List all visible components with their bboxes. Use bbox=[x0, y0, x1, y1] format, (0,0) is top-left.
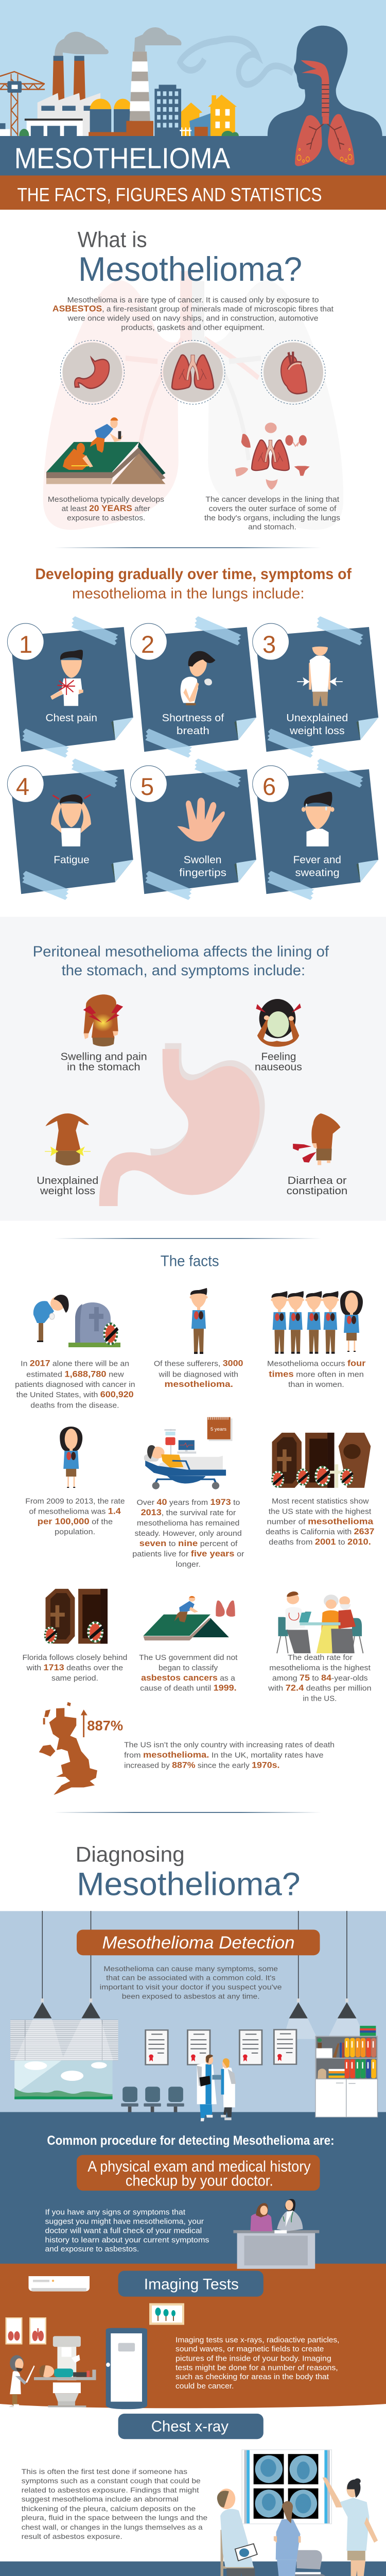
icon: lungs bbox=[161, 341, 225, 404]
labels: peritoneal symptoms: constipation bbox=[287, 1185, 347, 1197]
panel: hero header bbox=[0, 0, 386, 210]
detection text: important to visit your doctor if you suspect you've bbox=[100, 1983, 282, 1991]
illustration: roofer and lungs bbox=[143, 1596, 235, 1640]
title: MESOTHELIOMA bbox=[14, 142, 230, 175]
fact: death rate by age: with 72.4 deaths per million bbox=[268, 1683, 372, 1693]
card labels: weight loss bbox=[289, 725, 345, 737]
text: develops after 20 years: Mesothelioma typically develops bbox=[48, 495, 164, 504]
illustration: patient and doctor at desk bbox=[233, 2199, 319, 2269]
calendar label: 5 years bbox=[210, 1427, 227, 1432]
heading: peritoneal: the stomach, and symptoms include: bbox=[62, 962, 305, 979]
panel: CT scan bbox=[0, 2450, 386, 2576]
illustration: two coffins bbox=[44, 1589, 108, 1643]
labels: peritoneal symptoms: in the stomach bbox=[67, 1061, 141, 1073]
illustration: doctor's office bbox=[10, 1998, 364, 2119]
fact: government classification: The US government did not bbox=[139, 1653, 238, 1662]
fact: four times more in men: Mesothelioma occurs four bbox=[267, 1359, 366, 1368]
card labels: Unexplained bbox=[286, 713, 348, 724]
labels: peritoneal symptoms: Swelling and pain bbox=[61, 1051, 147, 1062]
card labels: sweating bbox=[295, 867, 340, 878]
fact: rate per 100,000: per 100,000 of the bbox=[38, 1516, 113, 1526]
fact: death rate by age: The death rate for bbox=[288, 1653, 353, 1662]
figure: nurse bbox=[274, 2501, 301, 2576]
illustration: coffins with wreaths bbox=[271, 1433, 371, 1488]
fact: rate per 100,000: From 2009 to 2013, the rate bbox=[25, 1497, 125, 1505]
fact: 3000 diagnosed: mesothelioma. bbox=[165, 1379, 233, 1389]
card numbers bbox=[16, 631, 276, 800]
card numbers: 4 bbox=[16, 773, 29, 800]
card labels: Fatigue bbox=[54, 855, 90, 866]
icon: UK map with rising arrow bbox=[39, 1702, 123, 1795]
heading: lung symptoms: mesothelioma in the lungs include: bbox=[72, 585, 305, 602]
card numbers: 1 bbox=[19, 631, 32, 658]
panel background bbox=[0, 2562, 386, 2576]
figure: swollen fingertips bbox=[177, 798, 225, 841]
panel: mesothelioma detection bbox=[0, 1911, 386, 2119]
waiting chairs bbox=[121, 2087, 184, 2119]
figure: feeling nauseous bbox=[256, 999, 301, 1047]
chest x-ray text bbox=[22, 2467, 207, 2540]
card labels: breath bbox=[177, 725, 209, 737]
symptom cards bbox=[7, 616, 378, 900]
hero illustration bbox=[0, 0, 386, 142]
certificates bbox=[145, 2029, 297, 2065]
figure: fever and sweating bbox=[302, 792, 335, 846]
pill: imaging tests: Imaging Tests bbox=[144, 2276, 239, 2293]
subtitle: THE FACTS, FIGURES AND STATISTICS bbox=[17, 184, 322, 205]
fact: rate per 100,000: population. bbox=[55, 1528, 95, 1536]
anatomy posters bbox=[5, 2317, 46, 2345]
figure: fatigue bbox=[51, 794, 91, 846]
chest x-ray text: suggest mesothelioma include an abnormal bbox=[22, 2495, 179, 2503]
background: faint lungs watermark bbox=[43, 271, 343, 530]
figure: man with lungs bbox=[189, 1288, 208, 1354]
x-ray machine and patient bbox=[34, 2336, 96, 2407]
labels: peritoneal symptoms: Diarrhea or bbox=[288, 1175, 347, 1187]
text: where the cancer develops: the body's organs, including the lungs bbox=[204, 514, 340, 522]
text: develops after 20 years: at least 20 YEARS after bbox=[62, 503, 150, 513]
heading: the facts: The facts bbox=[161, 1253, 219, 1269]
fact: florida: with 1713 deaths over the bbox=[26, 1663, 123, 1672]
window bbox=[10, 2020, 118, 2099]
illustration: hospital bed and calendar bbox=[144, 1417, 233, 1489]
fact: 2017 new patients: deaths from the disease. bbox=[30, 1401, 119, 1410]
intro text bbox=[52, 296, 334, 332]
fact: UK mortality: increased by 887% since the early 1970s. bbox=[124, 1760, 279, 1770]
imaging tests text: pictures of the inside of your body. Imaging bbox=[176, 2354, 331, 2363]
panel: what is mesothelioma bbox=[46, 228, 340, 532]
panel background bbox=[0, 2264, 386, 2408]
labels: peritoneal symptoms: Feeling bbox=[261, 1051, 296, 1062]
chest x-ray text: pleura, fluid in the space between the lungs and the bbox=[22, 2514, 207, 2522]
wall picture bbox=[149, 2303, 184, 2325]
card labels: Swollen bbox=[184, 855, 221, 866]
imaging tests text: such as checking for areas in the body that bbox=[176, 2373, 329, 2381]
fact: 3000 diagnosed bbox=[154, 1359, 243, 1389]
figures bbox=[50, 647, 343, 846]
labels: peritoneal symptoms: nauseous bbox=[255, 1061, 302, 1073]
fact: 2017 new patients bbox=[15, 1359, 135, 1410]
fact: survival rate: longer. bbox=[176, 1560, 201, 1569]
fact: survival rate: Over 40 years from 1973 to bbox=[137, 1497, 240, 1507]
fact: four times more in men: than in women. bbox=[288, 1380, 344, 1389]
panel: the facts bbox=[15, 1253, 374, 1795]
panel: common procedures bbox=[0, 2026, 386, 2264]
card labels bbox=[45, 713, 348, 878]
coat stand bbox=[221, 2530, 223, 2576]
fact: 3000 diagnosed: will be diagnosed with bbox=[158, 1370, 238, 1379]
intro text: were once widely used on navy ships, and in construction, automotive bbox=[67, 314, 318, 323]
pill: physical exam: A physical exam and medical history bbox=[87, 2158, 311, 2175]
stat: 887%: 887% bbox=[87, 1718, 123, 1733]
fact: survival rate bbox=[132, 1497, 244, 1569]
pill: mesothelioma detection bbox=[77, 1930, 320, 1955]
fact: california deaths: number of mesothelioma bbox=[267, 1516, 374, 1526]
figure: swelling and pain bbox=[83, 994, 123, 1046]
lamps bbox=[15, 1998, 364, 2060]
illustration: coughing patient and grave bbox=[33, 1295, 120, 1347]
illustration: roofers bbox=[46, 417, 165, 484]
text: where the cancer develops: covers the outer surface of some of bbox=[209, 504, 337, 513]
figure: chest pain bbox=[50, 650, 83, 706]
fact: 2017 new patients: estimated 1,688,780 new bbox=[26, 1369, 124, 1379]
icon: stomach bbox=[60, 341, 124, 404]
illustration: doctor and elderly couple bbox=[277, 1591, 363, 1653]
fact: government classification bbox=[139, 1653, 238, 1693]
illustration: imaging room bbox=[5, 2276, 184, 2409]
fact: UK mortality: The US isn’t the only country with increasing rates of death bbox=[124, 1740, 335, 1750]
card numbers: 6 bbox=[262, 773, 276, 800]
card labels: fingertips bbox=[179, 867, 226, 878]
detection text: Mesothelioma can cause many symptoms, some bbox=[103, 1964, 278, 1973]
figure: woman with lungs bbox=[60, 1427, 82, 1488]
figure: weight loss bbox=[45, 1113, 91, 1165]
heading: mesothelioma: Mesothelioma? bbox=[78, 250, 302, 288]
fact: survival rate: 2013, the survival rate for bbox=[141, 1507, 236, 1517]
fact: 2017 new patients: the United States, with 600,920 bbox=[16, 1389, 134, 1399]
panel background bbox=[0, 1911, 386, 2112]
heading: peritoneal: Peritoneal mesothelioma affects the lining of bbox=[33, 943, 329, 960]
fact: survival rate: mesothelioma has remained bbox=[137, 1519, 239, 1528]
heading: diagnosing mesothelioma: Mesothelioma? bbox=[77, 1867, 300, 1903]
figures: men and woman bbox=[271, 1291, 363, 1354]
fact: florida: Florida follows closely behind bbox=[23, 1653, 127, 1662]
fact: government classification: began to classify bbox=[159, 1664, 218, 1672]
card numbers: 3 bbox=[262, 631, 276, 658]
figure: female doctor pointing bbox=[323, 2478, 378, 2576]
panel background bbox=[0, 2112, 386, 2264]
fact: florida: same period. bbox=[51, 1674, 98, 1683]
imaging tests text: could be cancer. bbox=[176, 2382, 234, 2391]
figure: male doctor bbox=[197, 2055, 217, 2121]
physical exam text bbox=[45, 2208, 209, 2253]
fact: government classification: cause of death until 1999. bbox=[140, 1683, 237, 1693]
fact: california deaths: deaths is California with 2637 bbox=[266, 1527, 374, 1536]
pill: mesothelioma detection: Mesothelioma Detection bbox=[102, 1933, 294, 1953]
fact: california deaths: Most recent statistics show bbox=[272, 1497, 369, 1505]
figure: shortness of breath bbox=[181, 651, 216, 705]
text: develops after 20 years: exposure to asbestos. bbox=[67, 514, 145, 522]
chair bbox=[290, 2550, 325, 2576]
figure: diarrhea or constipation bbox=[293, 1113, 340, 1165]
pill: chest x-ray: Chest x-ray bbox=[151, 2418, 229, 2435]
card labels: Shortness of bbox=[162, 713, 224, 724]
heading: diagnosing mesothelioma bbox=[76, 1842, 301, 1903]
title band bbox=[0, 136, 386, 176]
heading: diagnosing mesothelioma: Diagnosing bbox=[76, 1842, 185, 1867]
text: where the cancer develops: and stomach. bbox=[248, 523, 296, 532]
illustration: large stomach bbox=[99, 1043, 265, 1206]
chest x-ray text: symptoms such as a constant cough that could be bbox=[22, 2477, 201, 2485]
chest x-ray text: related to asbestos exposure. Findings that might bbox=[22, 2486, 199, 2494]
figure: female doctor bbox=[212, 2058, 236, 2120]
panel: lung symptoms bbox=[7, 566, 378, 900]
fact: california deaths bbox=[266, 1497, 374, 1547]
icon: airway and lungs bbox=[295, 60, 355, 166]
physical exam text: suggest you might have mesothelioma, your bbox=[45, 2217, 204, 2226]
physical exam text: and exposure to asbestos. bbox=[45, 2245, 139, 2253]
fact: death rate by age: among 75 to 84-year-olds bbox=[272, 1673, 368, 1683]
figure: unexplained weight loss bbox=[297, 647, 343, 706]
lamp cords bbox=[42, 1911, 347, 1999]
fact: 3000 diagnosed: Of these sufferers, 3000 bbox=[154, 1359, 243, 1368]
text: where the cancer develops bbox=[204, 495, 340, 532]
bookshelf bbox=[315, 2026, 378, 2117]
heading: peritoneal bbox=[33, 943, 329, 979]
fact: california deaths: deaths from 2001 to 2010. bbox=[269, 1537, 371, 1547]
fact: death rate by age: mesothelioma is the highest bbox=[269, 1664, 371, 1672]
panel background bbox=[0, 917, 386, 1221]
chest x-ray text: chest wall, or changes in the lungs themselves as a bbox=[22, 2523, 203, 2531]
panel: imaging tests bbox=[0, 2199, 386, 2409]
fact: survival rate: steady. However, only around bbox=[135, 1529, 242, 1538]
chest x-ray text: result of asbestos exposure. bbox=[22, 2532, 122, 2540]
text: where the cancer develops: The cancer develops in the lining that bbox=[205, 495, 340, 504]
illustration: reading x-rays bbox=[217, 2450, 378, 2576]
door bbox=[106, 2328, 147, 2409]
air conditioner bbox=[29, 2276, 90, 2292]
fact: death rate by age: in the US. bbox=[303, 1694, 337, 1703]
fact: survival rate: seven to nine percent of bbox=[139, 1538, 238, 1548]
card labels: Fever and bbox=[293, 855, 341, 866]
chest x-ray text: thickening of the pleura, calcium deposits on the bbox=[22, 2504, 196, 2513]
heading: lung symptoms: Developing gradually over time, symptoms of bbox=[35, 566, 352, 583]
fact: rate per 100,000: of mesothelioma was 1.4 bbox=[29, 1506, 121, 1516]
fact: UK mortality bbox=[124, 1740, 335, 1770]
card labels: Chest pain bbox=[45, 713, 97, 724]
figure: male doctor viewing x-rays bbox=[217, 2488, 262, 2576]
doctor with pointer bbox=[9, 2355, 34, 2407]
icon: heart bbox=[261, 341, 325, 404]
physical exam text: history to learn about your current symptoms bbox=[45, 2236, 209, 2244]
pill: imaging tests bbox=[118, 2271, 264, 2297]
imaging tests text bbox=[176, 2336, 340, 2391]
detection text bbox=[100, 1964, 282, 2000]
panel: chest x-ray bbox=[22, 2414, 264, 2540]
intro text: ASBESTOS, a fire-resistant group of minerals made of microscopic fibres that bbox=[52, 304, 334, 314]
fact: four times more in men: times more often in men bbox=[269, 1369, 364, 1379]
text: develops after 20 years bbox=[48, 495, 164, 522]
pill: physical exam bbox=[77, 2155, 320, 2191]
fact: four times more in men bbox=[267, 1359, 366, 1389]
physical exam text: If you have any signs or symptoms that bbox=[45, 2208, 185, 2216]
detection text: been exposed to asbestos at any time. bbox=[122, 1992, 260, 2000]
illustration: doctors talking and filing cabinet bbox=[197, 2026, 378, 2121]
detection text: that can be associated with a common cold. It's bbox=[106, 1974, 275, 1982]
heading: lung symptoms bbox=[35, 566, 352, 602]
x-ray panel bbox=[242, 2450, 331, 2524]
illustration: affected organs bbox=[235, 422, 310, 489]
labels: peritoneal symptoms bbox=[37, 1051, 347, 1197]
panel: peritoneal mesothelioma bbox=[0, 917, 386, 1221]
pill: physical exam: checkup by your doctor. bbox=[126, 2172, 273, 2190]
labels: peritoneal symptoms: Unexplained bbox=[37, 1175, 98, 1187]
fact: florida bbox=[23, 1653, 127, 1683]
fact: rate per 100,000 bbox=[25, 1497, 125, 1536]
chest x-ray text: This is often the first test done if someone has bbox=[22, 2467, 187, 2476]
subtitle band bbox=[0, 176, 386, 210]
fact: UK mortality: from mesothelioma. In the UK, mortality rates have bbox=[124, 1750, 323, 1759]
card numbers: 5 bbox=[141, 773, 154, 800]
heading: common procedure: Common procedure for detecting Mesothelioma are: bbox=[47, 2133, 335, 2148]
fact: california deaths: the US state with the highest bbox=[269, 1507, 372, 1516]
imaging tests text: sound waves, or magnetic fields to create bbox=[176, 2345, 324, 2353]
fact: 2017 new patients: patients diagnosed with cancer in bbox=[15, 1380, 135, 1389]
labels: peritoneal symptoms: weight loss bbox=[40, 1185, 95, 1197]
heading: what is: What is bbox=[78, 228, 147, 252]
fact: death rate by age bbox=[268, 1653, 372, 1703]
physical exam text: doctor will want a full check of your medical bbox=[45, 2227, 202, 2235]
intro text: Mesothelioma is a rare type of cancer. It is caused only by exposure to bbox=[67, 296, 319, 304]
fact: 2017 new patients: In 2017 alone there will be an bbox=[21, 1359, 129, 1368]
fact: government classification: asbestos cancers as a bbox=[141, 1673, 235, 1683]
imaging tests text: Imaging tests use x-rays, radioactive particles, bbox=[176, 2336, 340, 2344]
fact: survival rate: patients live for five years or bbox=[132, 1549, 244, 1558]
pill: chest x-ray bbox=[118, 2414, 264, 2439]
imaging tests text: tests might be done for a number of reasons, bbox=[176, 2364, 338, 2372]
card numbers: 2 bbox=[141, 631, 154, 658]
intro text: products, gaskets and other equipment. bbox=[121, 323, 265, 332]
